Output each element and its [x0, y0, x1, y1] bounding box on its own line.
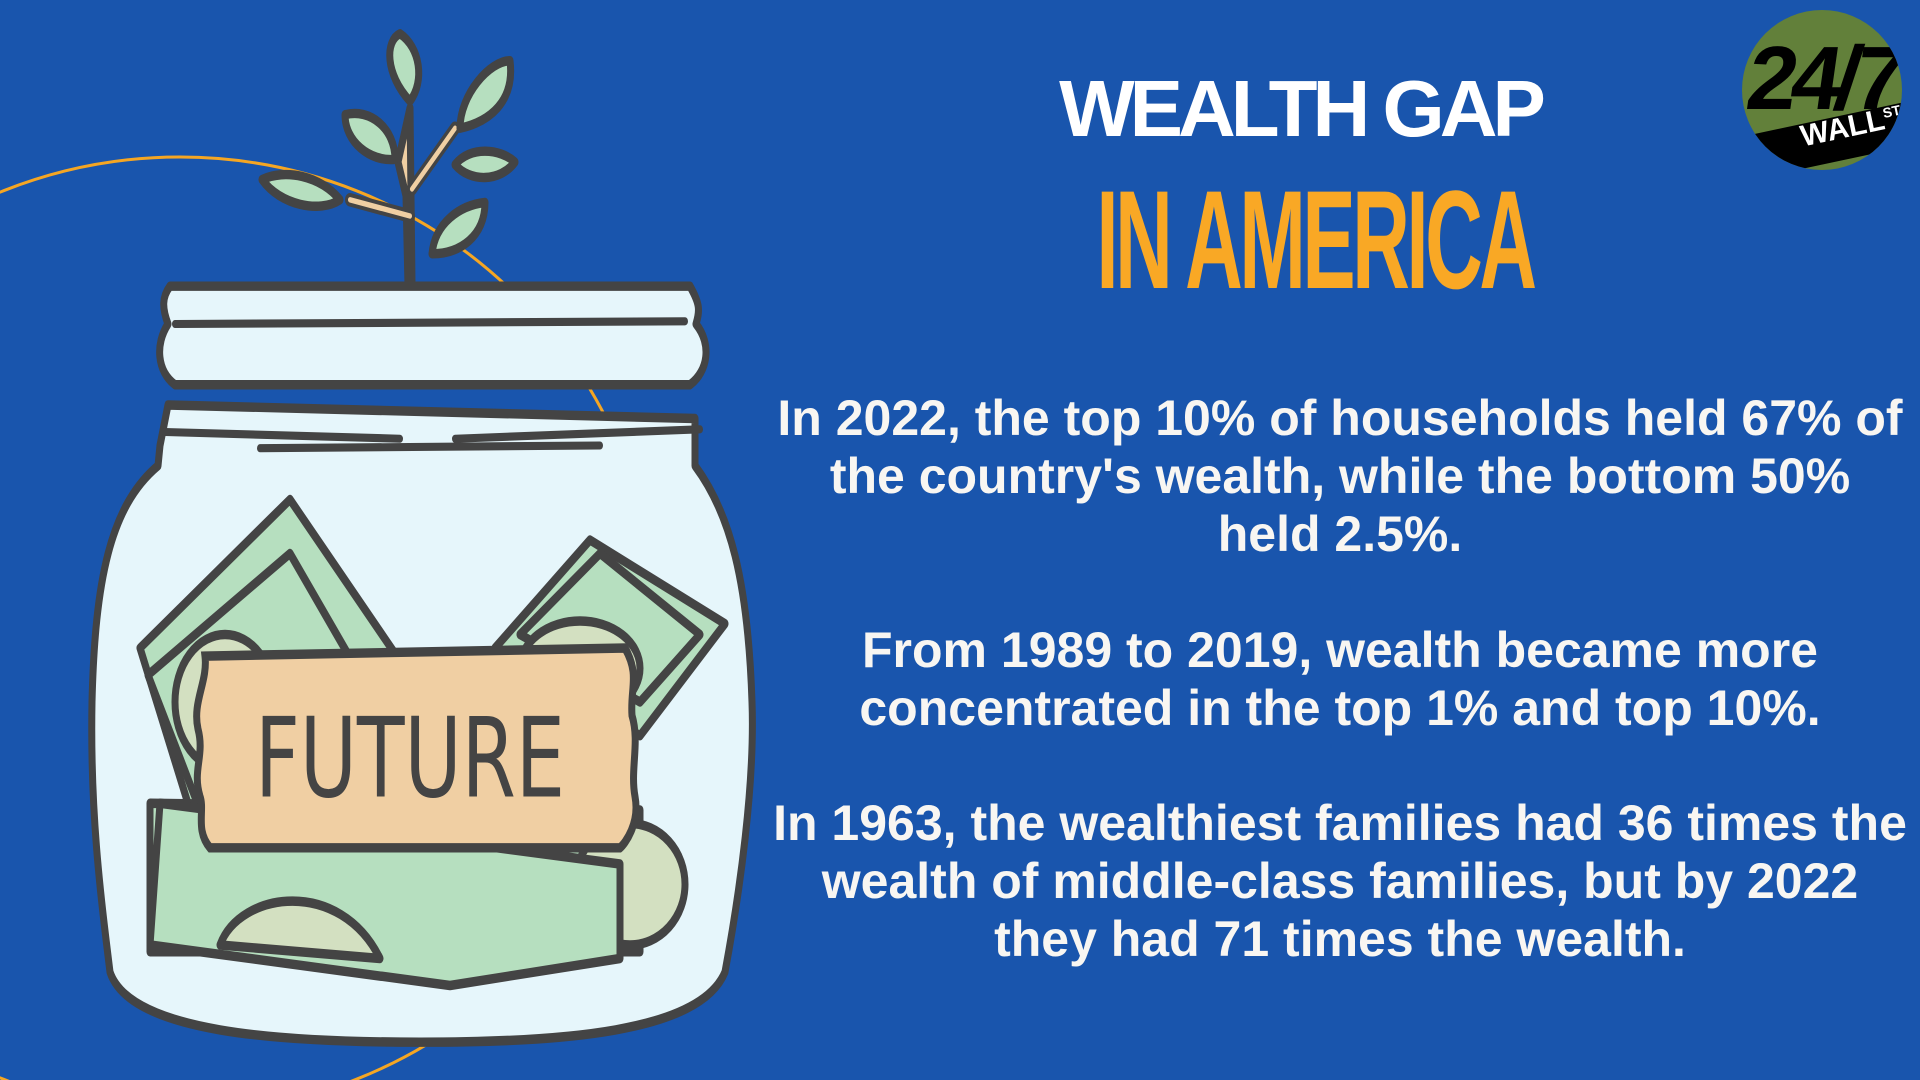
- text: stat 3: [773, 795, 1907, 967]
- text: stat 3: wealth of middle-class families, but by 2022: [822, 853, 1858, 909]
- money: [140, 500, 725, 986]
- text: stat 3: they had 71 times the wealth.: [994, 911, 1686, 967]
- illustration: jar with plant: [88, 29, 756, 1047]
- subtitle: IN AMERICA: [1096, 161, 1534, 318]
- decorative orange arc: [0, 156, 604, 1080]
- text: stat 1: In 2022, the top 10% of households held 67% of: [777, 390, 1903, 446]
- label: FUTURE: [197, 648, 636, 848]
- logo: 24/7 Wall St: WALLST: [1798, 102, 1902, 153]
- label: FUTURE: FUTURE: [255, 694, 565, 823]
- text: stat 1: the country's wealth, while the bottom 50%: [830, 448, 1850, 504]
- text: stat 2: From 1989 to 2019, wealth became more: [862, 622, 1818, 678]
- text: stat 1: [777, 390, 1903, 562]
- text: stat 2: [859, 622, 1821, 736]
- text: stat 2: concentrated in the top 1% and top 10%.: [859, 680, 1821, 736]
- title: WEALTH GAP: [1059, 64, 1541, 153]
- jar body: [92, 286, 752, 1042]
- logo: 24/7 Wall St: [1742, 10, 1902, 170]
- text: stat 3: In 1963, the wealthiest families had 36 times the: [773, 795, 1907, 851]
- plant: [262, 34, 515, 286]
- text: stat 1: held 2.5%.: [1218, 506, 1462, 562]
